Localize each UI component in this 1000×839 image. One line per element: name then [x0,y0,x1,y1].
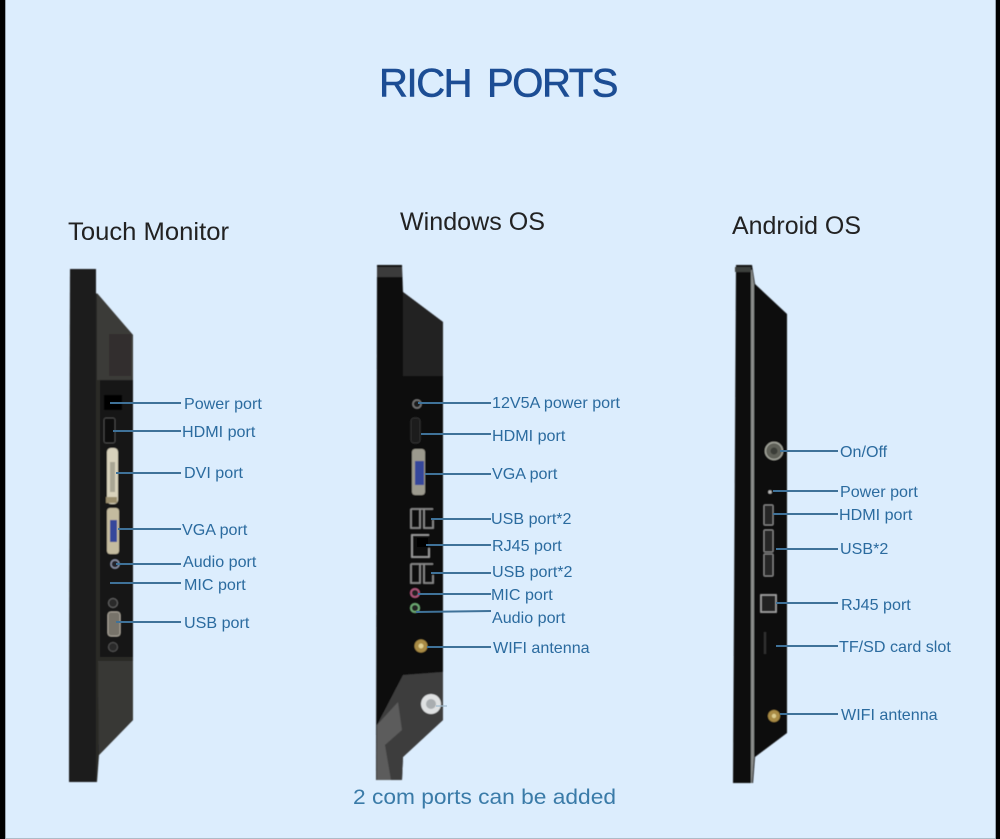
title: RICH [379,62,471,106]
callouts: touch monitor ports: USB port [184,614,250,632]
left video edge [0,0,6,839]
callouts: touch monitor ports: VGA port [182,521,248,539]
panel: windows os [353,208,620,809]
callouts: windows ports: RJ45 port [492,537,562,555]
callouts: android ports: TF/SD card slot [839,638,951,656]
callouts: android ports: WIFI antenna [841,706,938,724]
callouts: windows ports: 12V5A power port [492,394,620,412]
callouts: touch monitor ports: MIC port [184,576,246,594]
heading: windows os: Windows OS [400,208,545,236]
heading: touch monitor: Touch Monitor [68,218,229,246]
panel: touch monitor [68,218,262,782]
callouts: touch monitor ports: Audio port [183,553,257,571]
callouts: windows ports: VGA port [492,465,558,483]
callouts: android ports: HDMI port [839,506,913,524]
bottom video edge [6,838,995,839]
callouts: windows ports: USB port*2 [492,563,573,581]
heading: android os: Android OS [732,212,861,240]
title: PORTS [487,62,617,106]
monitor side view [69,269,133,782]
callouts: touch monitor ports: HDMI port [182,423,256,441]
callouts: windows ports [416,394,620,706]
panel: android os [732,212,951,783]
callouts: windows ports: USB port*2 [491,510,572,528]
callouts: android ports: On/Off [840,443,888,461]
windows unit side view [376,265,443,780]
android unit side view [733,265,787,783]
note: com ports: 2 com ports can be added [353,786,616,809]
callouts: touch monitor ports: DVI port [184,464,244,482]
right video edge [995,0,1000,839]
callouts: android ports: Power port [840,483,918,501]
callouts: android ports: RJ45 port [841,596,911,614]
callouts: windows ports: MIC port [491,586,553,604]
callouts: touch monitor ports [110,395,262,632]
callouts: android ports: USB*2 [840,540,888,558]
callouts: touch monitor ports: Power port [184,395,262,413]
callouts: windows ports: HDMI port [492,427,566,445]
callouts: windows ports: WIFI antenna [493,639,590,657]
callouts: windows ports: Audio port [492,609,566,627]
callouts: android ports [773,443,951,724]
